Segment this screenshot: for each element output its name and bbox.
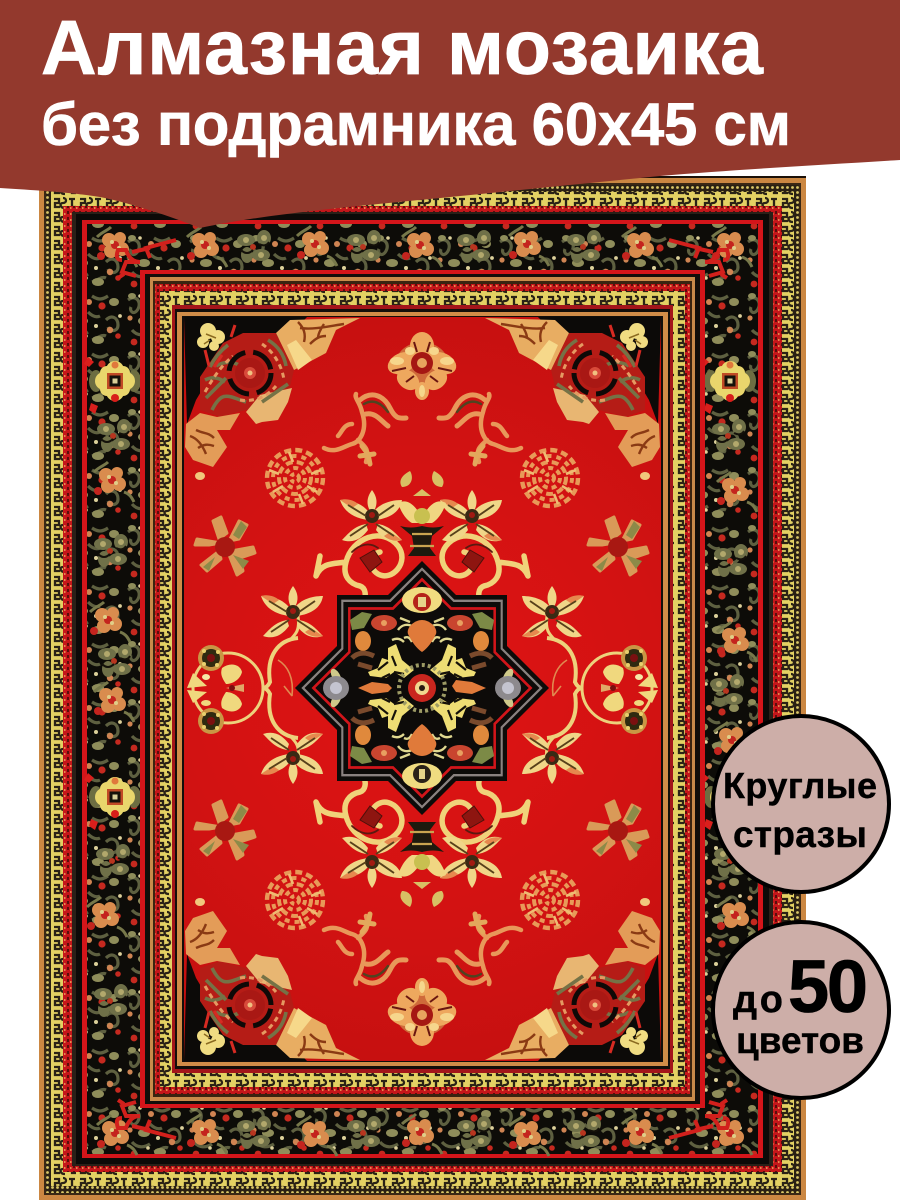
badge: up to 50 colours: до [733,979,783,1021]
left side ornament [187,586,323,784]
center top and bottom flowers [384,332,460,1046]
rosettes [84,357,756,830]
red field [184,317,661,1061]
central star medallion [295,561,549,815]
carpet [39,176,806,1200]
carpet frame bands [39,176,806,1200]
round discs [267,450,578,928]
badge: up to 50 colours [713,922,889,1098]
leaf sprigs [324,394,521,984]
badge: round rhinestones [713,716,889,892]
subtitle: без подрамника 60х45 см [41,91,791,158]
badge: up to 50 colours: 50 [788,945,868,1028]
medallion flowers [323,587,521,789]
header banner [0,0,900,228]
lower central ornament [316,778,528,907]
red corner knots [117,240,728,1138]
badge: round rhinestones: Круглые [723,765,877,806]
flower clusters [87,226,757,1156]
badge: up to 50 colours: цветов [736,1020,864,1061]
corner ornaments [184,317,661,1061]
right side ornament [522,586,658,784]
small flowers [195,517,648,859]
upper central ornament [316,471,528,600]
floral border [84,224,758,1156]
inner frame bands [140,270,705,1108]
title: Алмазная мозаика [41,5,764,91]
olive clusters [94,230,748,1149]
badge: round rhinestones: стразы [733,814,867,855]
